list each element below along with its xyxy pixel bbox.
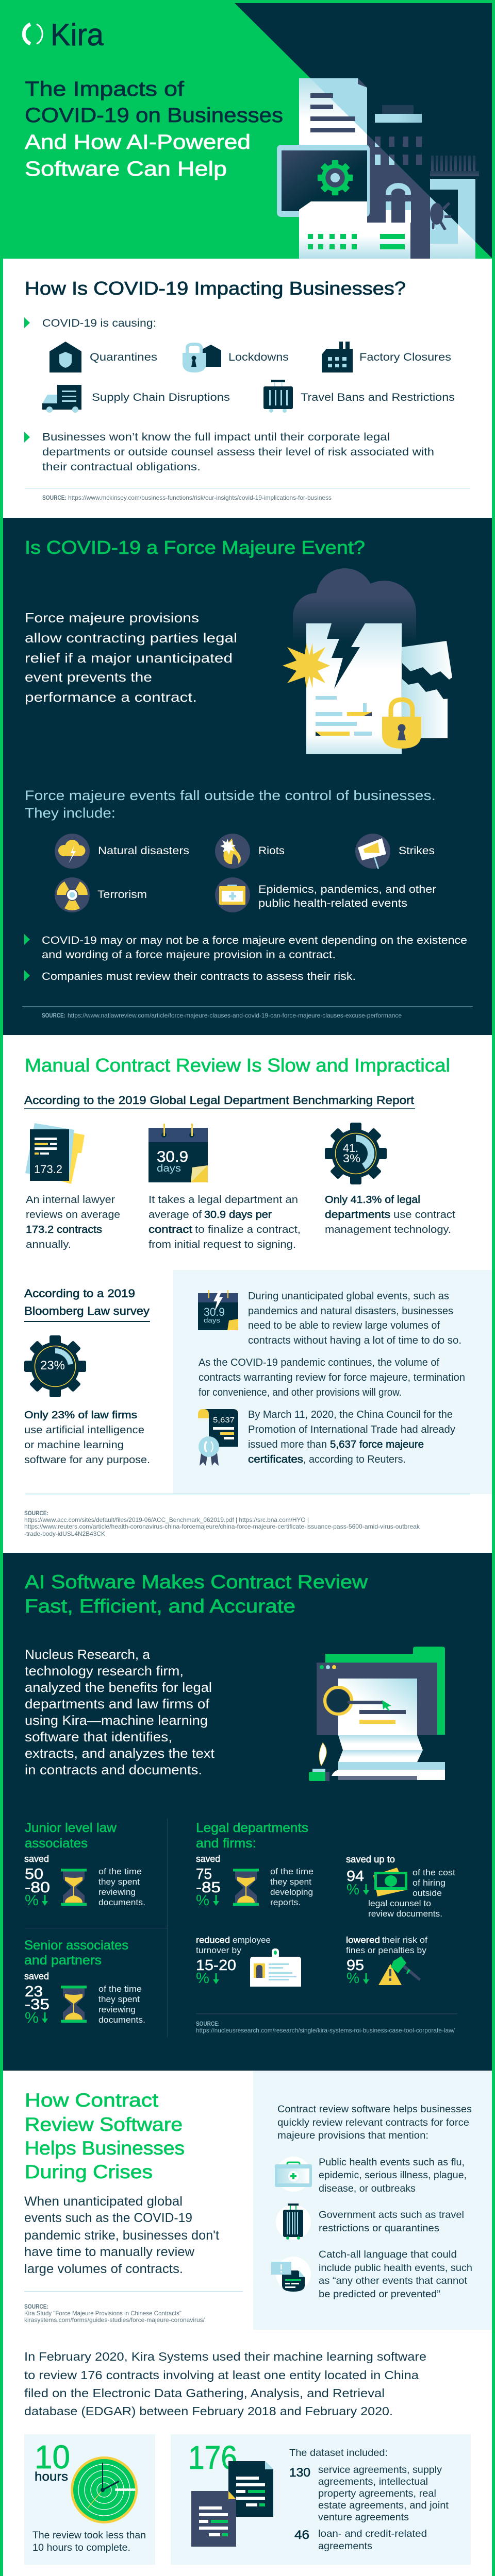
text: 30.9 days: It takes a legal department an <box>148 1194 298 1206</box>
source: SOURCE: <box>24 2303 48 2310</box>
block: lowered risk of fines: % <box>346 1970 359 1987</box>
icon: terrorism <box>55 877 147 912</box>
block: junior level law associates: 50 <box>25 1866 43 1883</box>
heading: Is COVID-19 a Force Majeure Event? <box>25 537 365 558</box>
block: legal departments and firms: reports. <box>270 1897 301 1907</box>
block: junior level law associates: documents. <box>98 1897 145 1907</box>
icon: clock <box>71 2456 138 2523</box>
block: legal departments and firms: saved <box>196 1854 220 1864</box>
icon: supply chain disruptions <box>42 385 230 413</box>
subheading: Bloomberg Law survey: Bloomberg Law survey <box>24 1304 150 1317</box>
text: 23% of law firms: software for any purpose. <box>24 1454 150 1466</box>
block: senior associates and partners: of the time <box>98 1984 142 1994</box>
block: legal departments and firms: developing <box>270 1887 313 1897</box>
subheading <box>25 788 436 821</box>
text: global events: need to be able to review large volumes of <box>248 1320 440 1331</box>
icon: lockdowns: Lockdowns <box>228 351 289 363</box>
text: 30.9 days <box>148 1194 301 1250</box>
text: definition: event prevents the <box>25 669 152 685</box>
icon: contracts folder 173.2 <box>25 1123 85 1184</box>
heading: How Is COVID-19 Impacting Businesses? <box>25 278 406 299</box>
heading: During Crises <box>25 2161 153 2182</box>
text: 173.2 contracts: An internal lawyer <box>26 1194 115 1206</box>
text: global events: contracts without having a lot of time to do so. <box>248 1335 461 1346</box>
block: saved up to 94%: legal counsel to <box>368 1899 431 1908</box>
text: when unanticipated: have time to manually review <box>24 2245 195 2259</box>
text: definition: relief if a major unanticipated <box>25 650 233 666</box>
block: lowered risk of fines: fines or penalties by <box>346 1945 427 1955</box>
block: saved up to 94%: of hiring <box>412 1878 446 1888</box>
text: 5,637 force majeure certificates: , according to Reuters. <box>303 1454 406 1465</box>
icon: small calendar: 30.9 <box>204 1306 225 1318</box>
block: saved up to 94%: saved up to <box>346 1854 395 1865</box>
icon: gear 41.3%: 3% <box>343 1152 360 1165</box>
bullet: may or may not: and wording of a force majeure provision in a contract. <box>42 949 336 961</box>
illustration: contract review window <box>309 1647 445 1781</box>
panel: 176 contracts dataset: loan- and credit-related <box>318 2529 427 2539</box>
block: senior associates and partners <box>24 1938 145 2026</box>
panel: how is COVID-19 impacting businesses <box>3 259 492 518</box>
source: https://www.natlawreview.com/article/force-majeure-clauses-and-covid-19-can-force-majeure-clauses-excuse-performance <box>68 1012 402 1019</box>
panel: 176 contracts dataset: agreements, intellectual <box>318 2477 428 2487</box>
text: provisions that mention: Contract review software helps businesses <box>277 2104 472 2115</box>
block: senior associates and partners: 23 <box>25 1984 43 2000</box>
text: public health events <box>319 2157 467 2194</box>
bullet: businesses won't know: Businesses won’t know the full impact until their corporate legal <box>42 431 390 443</box>
text: provisions that mention: quickly review relevant contracts for force <box>277 2117 469 2128</box>
text: definition <box>25 610 237 705</box>
panel: pandemic volume <box>173 1270 492 1494</box>
source: SOURCE: <box>196 2020 220 2027</box>
panel: how contract review software helps <box>3 2071 492 2576</box>
block: legal departments and firms: % <box>196 1892 209 1909</box>
text: public health events: epidemic, serious illness, plague, <box>319 2170 467 2181</box>
text: Nucleus Research: extracts, and analyzes the text <box>25 1745 215 1761</box>
icon: epidemics: Epidemics, pandemics, and other <box>258 884 436 895</box>
heading: AI Software Makes Contract Review <box>25 1571 368 1592</box>
heading: How Contract <box>25 2090 159 2111</box>
icon: first aid kit <box>275 2157 312 2192</box>
subheading: Bloomberg Law survey: According to a 2019 <box>24 1287 135 1300</box>
icon: ID badge <box>250 1948 301 1987</box>
text: definition: allow contracting parties legal <box>25 630 237 646</box>
block: junior level law associates: they spent <box>98 1877 140 1887</box>
text: pandemic continues: As the COVID-19 pandemic continues, the volume of <box>199 1357 439 1368</box>
icon: gear <box>318 160 353 195</box>
icon: certificate 5,637 <box>198 1409 238 1466</box>
title <box>25 78 283 180</box>
text: 23% of law firms: use artificial intelligence <box>24 1425 144 1436</box>
block: junior level law associates: of the time <box>98 1867 142 1876</box>
icon: gear 41.3%: 41. <box>343 1142 358 1155</box>
block: reduced employee turnover: 15-20 <box>196 1957 236 1974</box>
text: 30.9 days: contract <box>148 1224 193 1235</box>
panel: 176 contracts dataset <box>171 2434 471 2565</box>
block: senior associates and partners: % <box>25 2010 39 2026</box>
block: saved up to 94%: 94 <box>346 1868 364 1885</box>
icon: suitcase <box>276 2204 311 2240</box>
block: junior level law associates: % <box>25 1892 39 1909</box>
heading <box>25 1571 368 1617</box>
source: -trade-body-idUSL4N2B43CK <box>24 1530 105 1537</box>
block: junior level law associates: Junior level law <box>25 1821 117 1835</box>
panel: 176 contracts dataset: The dataset included: <box>289 2448 388 2459</box>
panel: AI software <box>3 1553 492 2071</box>
panel: 10 hours: The review took less than <box>32 2530 146 2541</box>
text: 5,637 force majeure certificates <box>248 1409 455 1465</box>
text: Nucleus Research: departments and law firms of <box>25 1696 210 1711</box>
heading: Manual Contract Review Is Slow and Impractical <box>25 1055 450 1076</box>
text: 173.2 contracts: annually. <box>26 1239 71 1250</box>
icon: money <box>373 1868 407 1896</box>
text: Nucleus Research: analyzed the benefits for legal <box>25 1680 212 1695</box>
icon: bug <box>430 202 451 230</box>
title: COVID-19 on Businesses <box>25 104 283 127</box>
bullet: companies must review: Companies must review their contracts to assess their risk. <box>42 971 356 982</box>
text: 41.3% <box>325 1194 455 1235</box>
text: 41.3%: use contract <box>393 1209 455 1221</box>
text: global events: During unanticipated global events, such as <box>248 1291 449 1302</box>
text: provisions that mention: majeure provisions that mention: <box>277 2130 428 2141</box>
icon: factory closures <box>322 342 451 372</box>
text: public health events: disease, or outbreaks <box>319 2183 416 2194</box>
block: senior associates and partners: and partners <box>24 1953 102 1968</box>
text: global events <box>248 1291 461 1346</box>
text: definition: performance a contract. <box>25 689 197 705</box>
text: February 2020 study: to review 176 contracts involving at least one entity located in China <box>24 2368 419 2382</box>
text: Nucleus Research: Nucleus Research, a <box>25 1647 151 1662</box>
block: saved up to 94% <box>346 1854 455 1919</box>
subheading: They include: <box>25 805 116 821</box>
text: 30.9 days: average of <box>148 1209 202 1221</box>
text: definition: Force majeure provisions <box>25 610 199 625</box>
text: Nucleus Research: software that identifies, <box>25 1729 172 1744</box>
block: saved up to 94%: % <box>346 1882 359 1898</box>
source: SOURCE: <box>42 1012 65 1019</box>
block: lowered risk of fines: lowered <box>346 1935 380 1945</box>
text: catch-all language: be predicted or prevented” <box>319 2289 440 2300</box>
text: 30.9 days: 30.9 days per <box>204 1209 272 1221</box>
panel: 176 contracts dataset: venture agreements <box>318 2512 409 2523</box>
text: when unanticipated: events such as the COVID-19 <box>24 2211 192 2225</box>
source <box>196 2020 455 2034</box>
label: strikes: Strikes <box>399 845 435 857</box>
text: February 2020 study <box>24 2350 426 2418</box>
text: government acts: restrictions or quarantines <box>319 2223 439 2234</box>
icon: small calendar: days <box>204 1316 221 1324</box>
block: junior level law associates: reviewing <box>98 1887 136 1897</box>
panel: manual contract review <box>3 1035 492 1553</box>
icon: gear 41.3% <box>325 1123 387 1184</box>
bullet: may or may not <box>24 934 467 961</box>
block: lowered risk of fines: their risk of <box>382 1935 427 1945</box>
block: legal departments and firms: of the time <box>270 1867 314 1876</box>
icon: certificate 5,637: 5,637 <box>213 1416 235 1425</box>
text: pandemic continues <box>199 1357 465 1398</box>
icon: gear 23%: 23% <box>40 1359 65 1372</box>
text: Nucleus Research <box>25 1647 215 1777</box>
icon: travel bans: Travel Bans and Restrictions <box>301 392 455 403</box>
icon: calendar 30.9 days: 30.9 <box>157 1148 188 1165</box>
heading: Fast, Efficient, and Accurate <box>25 1596 295 1617</box>
icon: quarantines <box>50 342 157 372</box>
text: 30.9 days: from initial request to signing. <box>148 1239 296 1250</box>
bullet: businesses won't know: departments or outside counsel assess their level of risk associated with <box>42 446 434 458</box>
icon: epidemics: public health-related events <box>258 897 407 909</box>
panel: 10 hours: 10 <box>35 2438 70 2476</box>
source: SOURCE: <box>42 494 67 501</box>
text: 173.2 contracts: 173.2 contracts <box>26 1224 102 1235</box>
title: Software Can Help <box>25 158 227 180</box>
block: saved up to 94%: outside <box>412 1888 442 1898</box>
icon: terrorism: Terrorism <box>97 889 147 901</box>
block: reduced employee turnover: % <box>196 1970 209 1987</box>
icon: natural disasters <box>55 834 189 869</box>
icon: factory closures: Factory Closures <box>359 351 451 363</box>
block: senior associates and partners: reviewing <box>98 2005 136 2014</box>
icon: contracts folder 173.2: 173.2 <box>34 1163 62 1176</box>
text: 41.3%: departments <box>325 1209 390 1221</box>
text: 41.3%: Only 41.3% of legal <box>325 1194 420 1206</box>
block: reduced employee turnover: turnover by <box>196 1945 242 1955</box>
text: 5,637 force majeure certificates: By March 11, 2020, the China Council for the <box>248 1409 453 1420</box>
block: legal departments and firms <box>196 1821 314 1909</box>
bullet: businesses won't know <box>24 431 434 473</box>
block: junior level law associates: saved <box>24 1854 49 1864</box>
block: saved up to 94%: of the cost <box>412 1868 455 1877</box>
panel: 176 contracts dataset: service agreements, supply <box>318 2465 442 2476</box>
text: 5,637 force majeure certificates: certificates <box>248 1454 303 1465</box>
text: 41.3%: management technology. <box>325 1224 451 1235</box>
panel: 10 hours: hours <box>35 2470 68 2484</box>
icon: small calendar <box>198 1290 238 1330</box>
panel: 176 contracts dataset: 130 <box>289 2466 310 2480</box>
text: catch-all language: include public health events, such <box>319 2263 472 2274</box>
source: https://www.acc.com/sites/default/files/2019-06/ACC_Benchmark_062019.pdf | https://src.bna.com/HYO | <box>24 1516 309 1523</box>
block: senior associates and partners: Senior associates <box>24 1938 128 1953</box>
heading: Helps Businesses <box>25 2138 185 2159</box>
block: junior level law associates <box>24 1821 145 1909</box>
block: legal departments and firms: they spent <box>270 1877 311 1887</box>
text: 5,637 force majeure certificates: 5,637 force majeure <box>330 1439 424 1450</box>
text: 173.2 contracts: reviews on average <box>26 1209 120 1221</box>
text: catch-all language <box>319 2249 472 2300</box>
text: pandemic continues: for convenience, and other provisions will grow. <box>199 1387 402 1398</box>
block: junior level law associates: -80 <box>25 1879 50 1896</box>
block: junior level law associates: associates <box>25 1836 88 1851</box>
panel: hero <box>24 3 492 259</box>
icon: catch-all language document <box>271 2257 311 2292</box>
text: 23% of law firms: or machine learning <box>24 1439 124 1451</box>
icon: feather and ink <box>309 1743 329 1781</box>
icon: riots: Riots <box>258 845 285 857</box>
text: 23% of law firms: Only 23% of law firms <box>24 1410 137 1421</box>
block: reduced employee turnover: employee <box>233 1935 271 1945</box>
source: SOURCE: <box>24 1510 48 1517</box>
text: Nucleus Research: using Kira—machine learning <box>25 1713 208 1728</box>
text: pandemic continues: contracts warranting review for force majeure, termination <box>199 1372 465 1383</box>
panel: 176 contracts dataset: 46 <box>294 2528 309 2542</box>
icon: quarantines: Quarantines <box>90 351 157 363</box>
block: senior associates and partners: saved <box>24 1971 49 1981</box>
bullet: may or may not: COVID-19 may or may not be a force majeure event depending on the existence <box>42 935 467 946</box>
source <box>24 2303 205 2324</box>
block: saved up to 94%: review documents. <box>368 1909 442 1919</box>
text: public health events: Public health events such as flu, <box>319 2157 465 2168</box>
text: global events: pandemics and natural disasters, businesses <box>248 1306 453 1317</box>
block: senior associates and partners: -35 <box>25 1996 50 2013</box>
block: senior associates and partners: they spent <box>98 1994 140 2004</box>
logo <box>24 18 104 52</box>
title: The Impacts of <box>25 78 185 100</box>
block: legal departments and firms: 75 <box>196 1866 212 1883</box>
logo: Kira <box>51 18 104 52</box>
icon: calendar 30.9 days: days <box>157 1163 181 1174</box>
icon: documents <box>191 2461 273 2547</box>
heading: Review Software <box>25 2114 183 2135</box>
text: government acts <box>319 2210 464 2234</box>
block: legal departments and firms: Legal departments <box>196 1821 308 1835</box>
text: February 2020 study: filed on the Electronic Data Gathering, Analysis, and Retrieval <box>24 2386 385 2400</box>
block: reduced employee turnover <box>196 1935 301 1987</box>
block: lowered risk of fines <box>346 1935 427 1987</box>
text: provisions that mention <box>277 2104 472 2141</box>
heading <box>25 2090 185 2182</box>
panel: 176 contracts dataset: 176 <box>188 2439 237 2476</box>
text: February 2020 study: In February 2020, Kira Systems used their machine learning software <box>24 2350 426 2363</box>
icon: natural disasters: Natural disasters <box>98 845 189 857</box>
text: when unanticipated <box>24 2194 219 2276</box>
icon: gear 23% <box>24 1335 86 1397</box>
text: when unanticipated: When unanticipated global <box>24 2194 183 2209</box>
text: Nucleus Research: technology research firm, <box>25 1663 184 1679</box>
text: February 2020 study: database (EDGAR) between February 2018 and February 2020. <box>24 2404 393 2418</box>
source: kirasystems.com/forms/guides-studies/force-majeure-coronavirus/ <box>24 2316 205 2324</box>
text: catch-all language: Catch-all language that could <box>319 2249 457 2260</box>
source: https://www.mckinsey.com/business-functions/risk/our-insights/covid-19-implications-for-business <box>68 494 332 501</box>
source: https://nucleusresearch.com/research/single/kira-systems-roi-business-case-tool-corporate-law/ <box>196 2027 455 2034</box>
block: legal departments and firms: and firms: <box>196 1836 256 1851</box>
source: https://www.reuters.com/article/health-coronavirus-china-forcemajeure/china-force-majeure-certificate-issuance-pass-5600-amid-virus-outbreak <box>24 1523 420 1530</box>
icon: epidemics <box>215 877 436 912</box>
block: legal departments and firms: -85 <box>196 1879 221 1896</box>
bullet: COVID-19 is causing: COVID-19 is causing: <box>42 317 156 329</box>
text: 173.2 contracts <box>26 1194 120 1250</box>
hero illustration: office, document, monitor and bug <box>277 78 479 259</box>
icon: magnifier <box>325 1687 354 1714</box>
panel: is COVID-19 a force majeure event <box>3 518 492 1035</box>
icon: travel bans <box>263 380 455 413</box>
source <box>24 1510 420 1537</box>
icon: padlock <box>382 700 421 749</box>
panel: 10 hours: 10 hours to complete. <box>32 2543 130 2553</box>
block: reduced employee turnover: reduced <box>196 1935 230 1945</box>
icon: calendar 30.9 days <box>148 1124 208 1182</box>
text: when unanticipated: pandemic strike, businesses don't <box>24 2228 219 2243</box>
text: Nucleus Research: in contracts and documents. <box>25 1762 202 1777</box>
text: government acts: Government acts such as travel <box>319 2210 464 2221</box>
panel: 176 contracts dataset: property agreements, real <box>318 2488 436 2499</box>
icon: lockdowns <box>183 344 289 372</box>
icon: supply chain disruptions: Supply Chain Disruptions <box>92 392 230 403</box>
source: Kira Study "Force Majeure Provisions in Chinese Contracts" <box>24 2310 182 2317</box>
icon: strikes <box>355 834 390 869</box>
block: senior associates and partners: documents. <box>98 2015 145 2025</box>
text: when unanticipated: large volumes of contracts. <box>24 2262 183 2276</box>
text: 5,637 force majeure certificates: Promotion of International Trade had already <box>248 1424 455 1435</box>
panel: 10 hours <box>24 2434 155 2565</box>
bullet: businesses won't know: their contractual obligations. <box>42 461 201 473</box>
illustration: storm cloud, cracked contract and padlock <box>283 568 452 754</box>
text: catch-all language: as “any other events that cannot <box>319 2276 468 2286</box>
panel: 176 contracts dataset: estate agreements, and joint <box>318 2500 449 2511</box>
text: 5,637 force majeure certificates: issued more than <box>248 1439 327 1450</box>
subheading: benchmarking report: According to the 2019 Global Legal Department Benchmarking Report <box>24 1094 414 1107</box>
panel: 176 contracts dataset: agreements <box>318 2541 372 2552</box>
text: 23% of law firms <box>24 1410 150 1466</box>
subheading: Force majeure events fall outside the control of businesses. <box>25 788 436 803</box>
subheading: Bloomberg Law survey <box>24 1287 150 1322</box>
block: lowered risk of fines: 95 <box>346 1957 364 1974</box>
text: 30.9 days: to finalize a contract, <box>195 1224 301 1235</box>
title: And How AI-Powered <box>25 131 251 154</box>
icon: warning and gavel <box>378 1956 421 1985</box>
icon: riots <box>215 834 285 869</box>
